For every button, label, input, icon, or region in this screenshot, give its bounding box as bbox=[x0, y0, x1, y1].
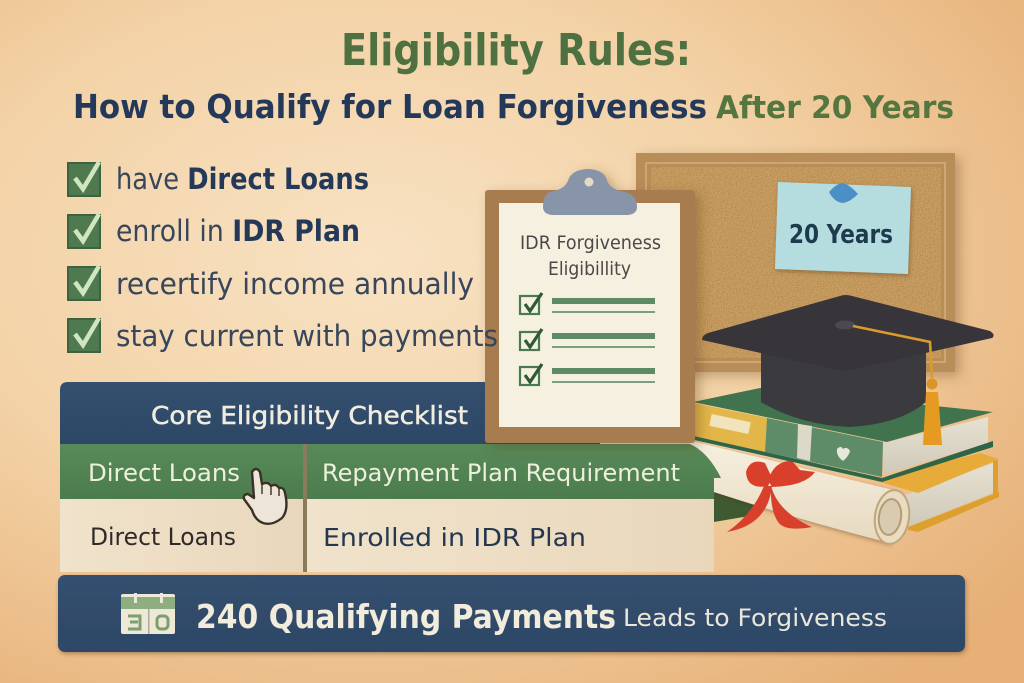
clipboard row 2 bbox=[520, 329, 655, 350]
heading line 2: How to Qualify for Loan Forgiveness bbox=[73, 87, 707, 126]
mortarboard bbox=[702, 295, 994, 371]
button bbox=[835, 320, 855, 330]
sticky note: 20 years bbox=[775, 182, 911, 274]
frame bbox=[636, 153, 955, 372]
money stack bbox=[714, 492, 755, 522]
item 4: stay current with payments bbox=[116, 319, 498, 353]
heart bbox=[837, 447, 850, 461]
item 2: enroll in IDR Plan bbox=[116, 214, 360, 248]
clipboard row 1 bbox=[520, 293, 655, 314]
books and diploma stack bbox=[687, 388, 999, 546]
yellow book bottom cover bbox=[908, 492, 999, 532]
cap base bbox=[761, 350, 926, 427]
clip bbox=[543, 169, 637, 215]
item 1: have Direct Loans bbox=[116, 162, 369, 196]
scroll end bbox=[871, 488, 913, 546]
clipboard row 3 bbox=[520, 364, 655, 385]
cork surface bbox=[651, 167, 941, 358]
clipboard title: IDR Forgiveness bbox=[520, 232, 661, 254]
banner text: Leads to Forgiveness bbox=[623, 604, 887, 632]
beige cell left label: Direct Loans bbox=[90, 523, 236, 551]
note label: 20 Years bbox=[789, 220, 893, 250]
clipboard bbox=[485, 169, 695, 443]
core eligibility table bbox=[60, 382, 721, 572]
pin bbox=[829, 183, 858, 203]
tassel cord bbox=[853, 326, 932, 378]
page block bbox=[883, 417, 988, 475]
yellow book spine edge bbox=[993, 460, 998, 495]
bottom banner bbox=[58, 575, 965, 652]
green cell left bbox=[60, 444, 303, 499]
banner bar bbox=[58, 575, 965, 652]
note paper bbox=[775, 182, 911, 274]
green cell right bbox=[306, 444, 721, 499]
green cell left label: Direct Loans bbox=[88, 459, 240, 487]
graduation cap bbox=[702, 295, 994, 445]
cover top bbox=[693, 388, 993, 442]
spine band bbox=[797, 424, 812, 461]
heading line 2 accent: After 20 Years bbox=[716, 90, 954, 126]
check icon 3 bbox=[68, 266, 100, 300]
book: yellow lower bbox=[873, 453, 999, 532]
title bbox=[73, 25, 954, 126]
banner emphasis: 240 Qualifying Payments bbox=[196, 597, 616, 636]
icon: calendar bbox=[121, 593, 175, 634]
check icon 4 bbox=[68, 318, 100, 352]
yellow book pages bbox=[905, 463, 993, 527]
board bbox=[485, 190, 695, 443]
heading line 1: Eligibility Rules: bbox=[341, 25, 691, 76]
diploma scroll bbox=[687, 440, 913, 546]
corkboard bbox=[636, 153, 955, 372]
yellow book top cover bbox=[873, 453, 999, 493]
check icon 2 bbox=[68, 214, 100, 248]
spine green bbox=[765, 418, 883, 477]
clipboard subtitle: Eligibillity bbox=[548, 258, 631, 280]
requirements checklist bbox=[68, 162, 498, 353]
green cell right label: Repayment Plan Requirement bbox=[322, 459, 680, 487]
item 3: recertify income annually bbox=[116, 267, 474, 301]
spine label bbox=[709, 414, 751, 434]
ribbon bow bbox=[727, 461, 815, 532]
paper bbox=[499, 203, 680, 427]
tassel bbox=[923, 392, 942, 445]
table header label: Core Eligibility Checklist bbox=[151, 401, 468, 430]
beige cell right bbox=[307, 499, 714, 572]
spine yellow bbox=[689, 402, 767, 452]
tassel knob bbox=[926, 378, 938, 390]
bottom cover bbox=[689, 435, 993, 482]
beige cell left bbox=[60, 499, 303, 572]
book: green upper bbox=[689, 388, 993, 482]
clip hole bbox=[584, 178, 594, 186]
check icon 1 bbox=[68, 162, 100, 196]
icon: hand cursor bbox=[244, 469, 286, 524]
table header bbox=[60, 382, 600, 444]
beige cell right label: Enrolled in IDR Plan bbox=[323, 523, 586, 552]
cell divider bbox=[303, 444, 307, 572]
